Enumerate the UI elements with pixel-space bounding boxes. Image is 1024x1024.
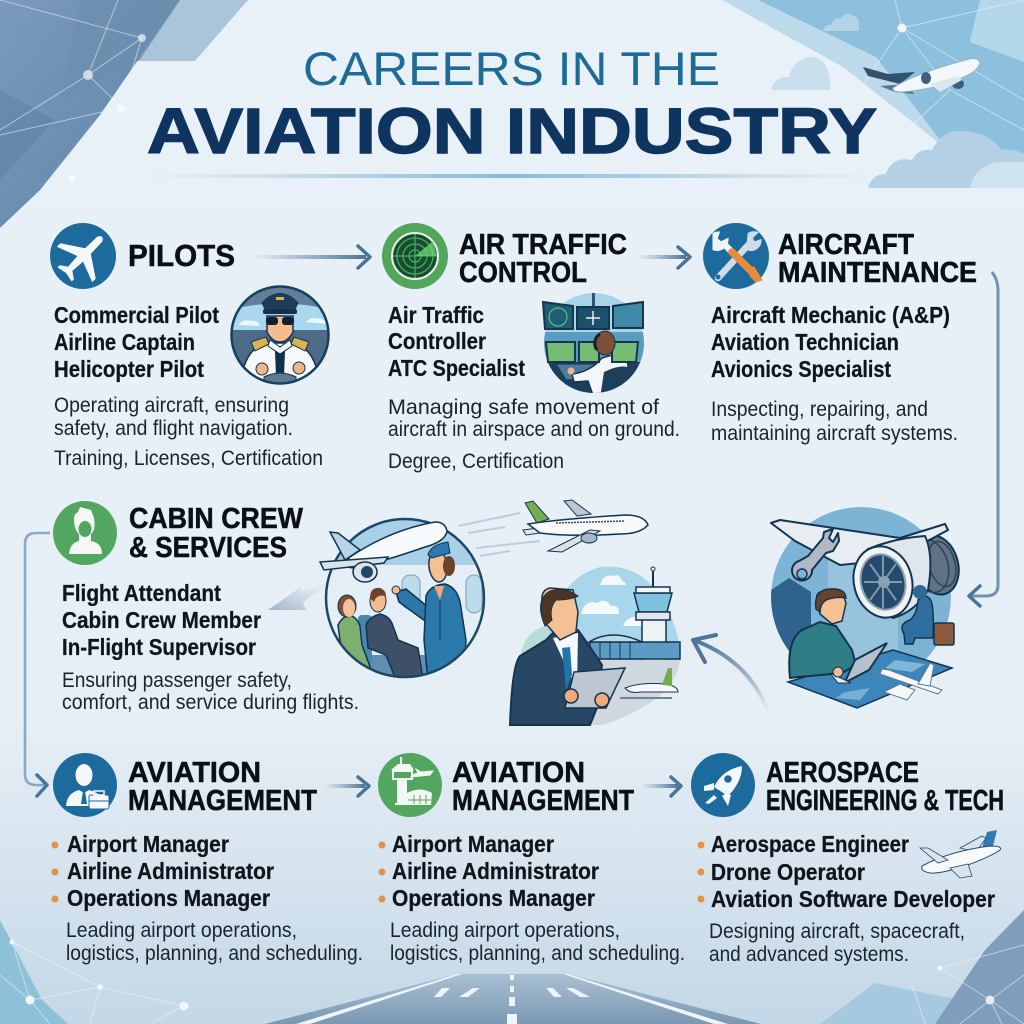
job titles: [54, 302, 219, 382]
icon: airplane: [47, 219, 120, 292]
description: [54, 393, 323, 470]
description: maintaining aircraft systems.: [711, 421, 958, 445]
icon: plane in the top-right sky: [863, 58, 980, 94]
illustration: pilot in cockpit: [230, 285, 330, 390]
job titles: Aircraft Mechanic (A&P): [711, 302, 950, 328]
description: [388, 395, 680, 473]
arrow: airport to cabin illustration: [268, 582, 332, 610]
heading: MANAGEMENT: [128, 785, 317, 817]
description: Inspecting, repairing, and: [711, 397, 928, 421]
arrow: maintenance to airport illustration: [693, 635, 768, 712]
heading: MAINTENANCE: [778, 257, 977, 289]
heading: MANAGEMENT: [452, 785, 634, 817]
icon: crossed wrenches: [703, 223, 769, 289]
icon: small aircraft: [920, 830, 1001, 878]
panel: aerospace engineering and tech: [691, 753, 1004, 966]
job titles list: Aviation Software Developer: [711, 886, 995, 912]
job titles list: Drone Operator: [711, 859, 865, 885]
icon: flight attendant: [53, 501, 117, 565]
heading: [128, 757, 317, 817]
bottom-left geometric corner: [0, 920, 188, 1024]
job titles: Helicopter Pilot: [54, 356, 204, 382]
job titles: [62, 580, 261, 660]
description: safety, and flight navigation.: [54, 416, 293, 440]
job titles: ATC Specialist: [388, 355, 525, 381]
description: logistics, planning, and scheduling.: [390, 941, 685, 965]
job titles: Airline Captain: [54, 329, 195, 355]
heading: CONTROL: [459, 257, 587, 289]
panel: aircraft maintenance: [703, 223, 977, 445]
job titles list: Aerospace Engineer: [711, 831, 909, 857]
heading: PILOTS: [128, 238, 235, 273]
description: Operating aircraft, ensuring: [54, 393, 289, 417]
heading: AEROSPACE: [766, 757, 919, 789]
panel: aviation management (centre): [378, 753, 685, 965]
panel: air traffic control: [382, 223, 680, 473]
heading: AVIATION: [452, 757, 585, 789]
arrow: pilots to air traffic control: [250, 246, 370, 268]
job titles list: [698, 831, 995, 912]
description: [709, 919, 965, 966]
job titles list: Operations Manager: [67, 885, 270, 911]
job titles list: [378, 831, 599, 911]
panel: aviation management (left): [52, 753, 363, 965]
description: Degree, Certification: [388, 449, 564, 473]
arrow: management to management: [325, 777, 369, 796]
description: Leading airport operations,: [390, 918, 620, 942]
heading: [129, 503, 304, 564]
title: AVIATION INDUSTRY: [147, 95, 877, 167]
title underline: [145, 174, 875, 178]
top-left geometric corner: [0, 0, 248, 228]
illustration: controller at radar desk: [542, 293, 644, 393]
job titles: Avionics Specialist: [711, 356, 891, 382]
arrow: maintenance down to illustration: [969, 272, 998, 606]
description: and advanced systems.: [709, 942, 909, 966]
job titles list: Operations Manager: [392, 885, 595, 911]
job titles: Cabin Crew Member: [62, 607, 261, 633]
description: Leading airport operations,: [66, 918, 297, 942]
job titles list: Airline Administrator: [392, 858, 599, 884]
job titles list: Airport Manager: [392, 831, 554, 857]
job titles: [388, 302, 525, 381]
job titles: Aviation Technician: [711, 329, 899, 355]
arrow: cabin crew to management connector: [25, 533, 50, 796]
icon: radar: [382, 223, 448, 289]
runway: [265, 974, 761, 1024]
icon: manager with briefcase: [53, 753, 117, 817]
description: Ensuring passenger safety,: [62, 668, 292, 692]
heading: AVIATION: [128, 757, 261, 789]
illustration: airport manager: [510, 567, 680, 725]
panel: cabin crew and services: [53, 501, 490, 714]
job titles: Flight Attendant: [62, 580, 221, 606]
heading: [452, 757, 634, 817]
heading: CABIN CREW: [129, 503, 304, 535]
illustration: cabin scene with plane: [320, 515, 490, 685]
illustration: plane in flight: [458, 500, 648, 556]
description: [390, 918, 685, 965]
job titles list: [52, 831, 274, 911]
description: Training, Licenses, Certification: [54, 446, 323, 470]
job titles: [711, 302, 950, 382]
icon: rocket: [691, 753, 755, 817]
icon: airport tower: [378, 753, 442, 817]
arrow: air traffic control to maintenance: [638, 247, 690, 268]
job titles: Controller: [388, 328, 486, 354]
job titles list: Airline Administrator: [67, 858, 274, 884]
description: [711, 397, 958, 445]
bottom-right geometric corner: [820, 910, 1024, 1024]
top-right geometric corner with clouds: [722, 0, 1024, 188]
heading: [778, 229, 977, 289]
description: aircraft in airspace and on ground.: [388, 417, 680, 441]
description: comfort, and service during flights.: [62, 690, 359, 714]
job titles: Commercial Pilot: [54, 302, 219, 328]
title: CAREERS IN THE: [303, 42, 720, 95]
heading: AIRCRAFT: [778, 229, 914, 261]
illustration: engine maintenance: [771, 507, 965, 708]
description: Managing safe movement of: [388, 395, 659, 419]
heading: [766, 757, 1004, 817]
description: Designing aircraft, spacecraft,: [709, 919, 965, 943]
panel: pilots: [47, 219, 330, 470]
title: [147, 42, 877, 167]
job titles list: Airport Manager: [67, 831, 229, 857]
heading: & SERVICES: [129, 532, 287, 564]
description: [66, 918, 363, 965]
job titles: Air Traffic: [388, 302, 484, 328]
heading: [459, 229, 627, 289]
arrow: management to aerospace: [642, 777, 681, 796]
job titles: In-Flight Supervisor: [62, 634, 256, 660]
description: [62, 668, 359, 714]
description: logistics, planning, and scheduling.: [66, 941, 363, 965]
heading: AIR TRAFFIC: [459, 229, 627, 261]
